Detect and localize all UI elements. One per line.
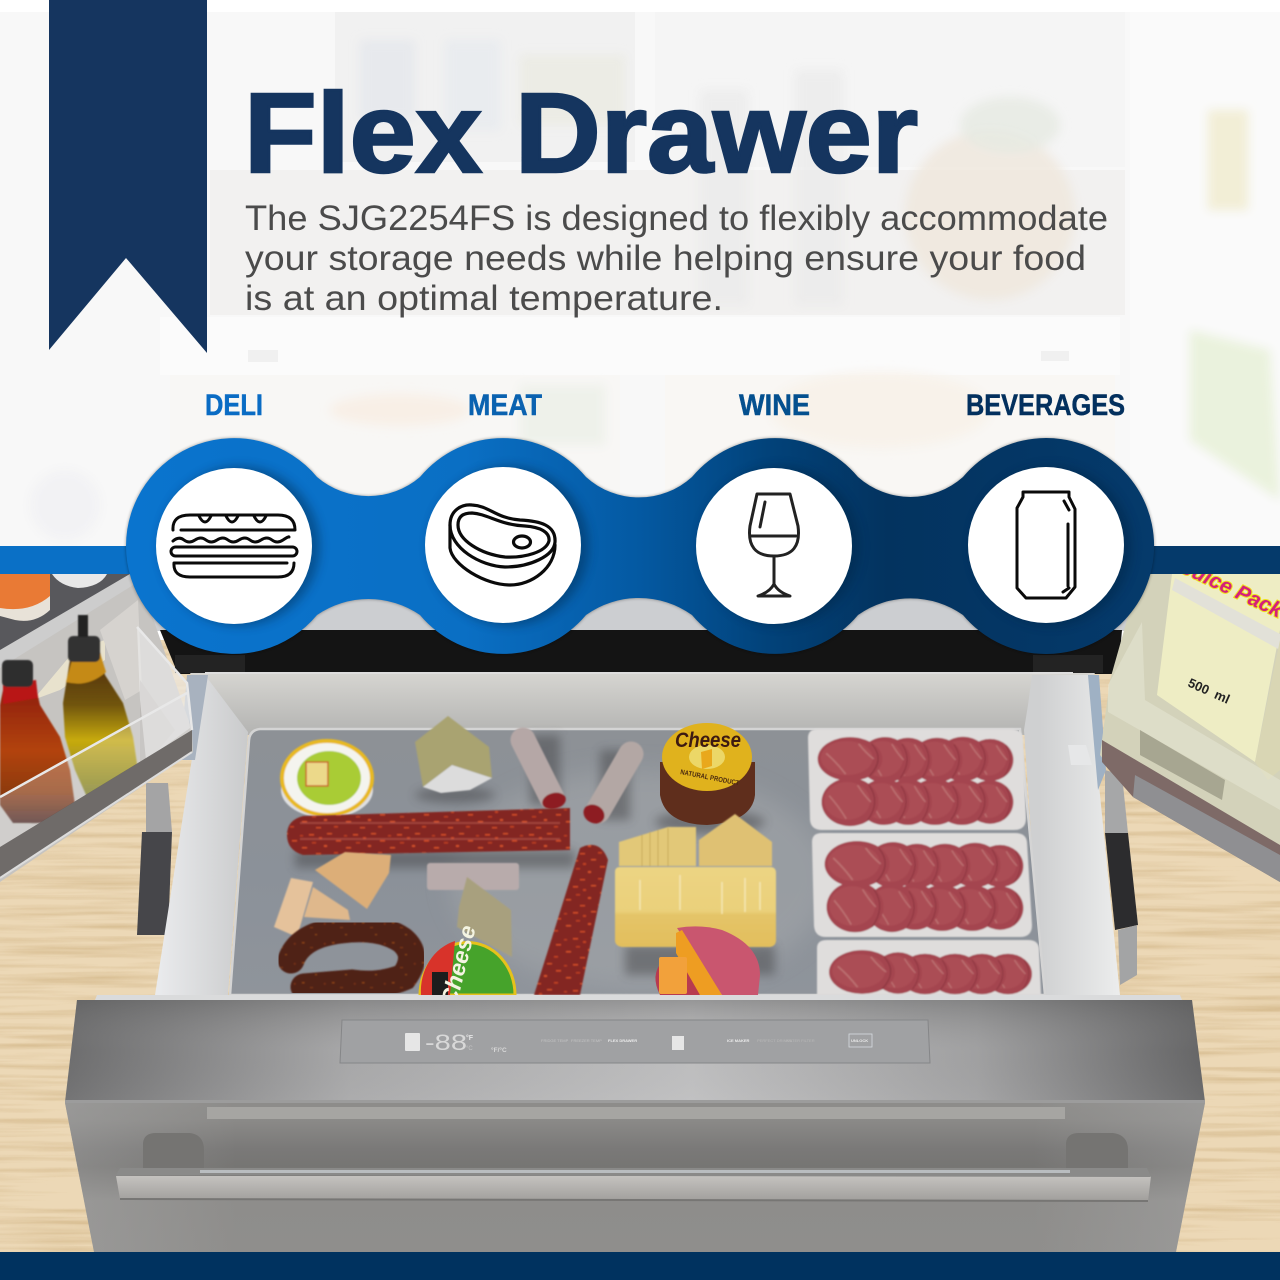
control display: ICE MAKER [727, 1038, 750, 1043]
deli: green cheese [420, 922, 515, 1008]
faded fridge interior background [0, 0, 1280, 562]
upper door shelf with cup [0, 574, 138, 668]
handle posts [143, 1133, 1128, 1170]
deli: diagonal salami [534, 845, 608, 995]
lip [95, 995, 1182, 1000]
clear bin [1108, 622, 1280, 810]
wine bubble with glass icon [696, 468, 852, 624]
meat tray 3 [817, 940, 1041, 995]
deli: green cheese: Cheese [436, 922, 481, 1008]
deli: peach wedge and pieces [274, 852, 391, 937]
control display: FLEX DRAWER [608, 1038, 637, 1043]
control display: PERFECT DRINKS [757, 1038, 792, 1043]
deli: green label cheese [280, 739, 374, 818]
clear bin [137, 627, 190, 760]
ribbon banner [49, 0, 207, 353]
meat trays [808, 729, 1041, 995]
description paragraph [245, 199, 1108, 318]
title: Flex Drawer [244, 70, 918, 196]
meat tray 1 [808, 729, 1026, 830]
door bin front strip [0, 730, 192, 878]
blue connector bands [0, 546, 1280, 574]
control display [340, 1020, 930, 1063]
steel tray floor [230, 729, 1045, 995]
deli: red wax cheese [655, 926, 760, 995]
shadows under food [295, 735, 775, 975]
description paragraph: is at an optimal temperature. [245, 279, 723, 318]
lower panel [65, 1103, 1205, 1252]
drawer back wall [190, 673, 1095, 735]
control display: FRIDGE TEMP [541, 1038, 569, 1043]
sauce bottle [0, 660, 75, 823]
control display: UNLOCK [851, 1038, 868, 1043]
juice carton: 500 ml [1186, 675, 1232, 707]
control display: FREEZER TEMP [571, 1038, 602, 1043]
category labels: BEVERAGES [966, 389, 1125, 422]
meat tray 2 [812, 833, 1032, 937]
control display: °F [466, 1034, 474, 1042]
beverages bubble with can icon [968, 467, 1124, 623]
category labels: DELI [205, 389, 263, 422]
door bin lower strip [1102, 740, 1280, 882]
description paragraph: your storage needs while helping ensure your food [245, 239, 1086, 278]
category labels: WINE [739, 389, 810, 422]
description paragraph: The SJG2254FS is designed to flexibly accommodate [245, 199, 1108, 238]
juice carton [1157, 556, 1280, 780]
drawer front panel [65, 995, 1205, 1252]
deli: beige wedge [457, 877, 512, 957]
left open door with bottles [0, 574, 193, 882]
control display: -88 [425, 1030, 467, 1055]
deli bubble with sandwich icon [156, 468, 312, 624]
meat bubble with steak icon [425, 467, 581, 623]
deli: olive wedge [415, 716, 492, 793]
category labels: MEAT [468, 389, 542, 422]
drawer left wall [155, 675, 248, 995]
control display: °F/°C [491, 1046, 507, 1054]
category labels [205, 389, 1125, 422]
deli: brown wheel cheese [660, 723, 755, 825]
handle bar [116, 1168, 1151, 1201]
bottom navy bar [0, 1252, 1280, 1280]
oil bottle [63, 615, 138, 797]
connected bubble strip [126, 438, 1154, 654]
upper panel [65, 1000, 1205, 1102]
deli: long salami [287, 808, 570, 855]
drawer right wall [1024, 675, 1120, 995]
right open door with carton [1100, 556, 1280, 882]
deli: brown wheel cheese: NATURAL PRODUCT [680, 769, 740, 788]
refrigerator cavity and frame [120, 574, 1160, 985]
deli: yellow cheeses [615, 814, 776, 947]
open drawer interior [155, 672, 1120, 1008]
deli: gristle sticks [427, 740, 631, 890]
deli: brown wheel cheese: Cheese [675, 729, 741, 752]
control display: °C [466, 1046, 473, 1052]
deli: ring sausage [291, 929, 412, 987]
control display: WATER FILTER [786, 1038, 815, 1043]
wood countertop [0, 640, 1280, 1255]
